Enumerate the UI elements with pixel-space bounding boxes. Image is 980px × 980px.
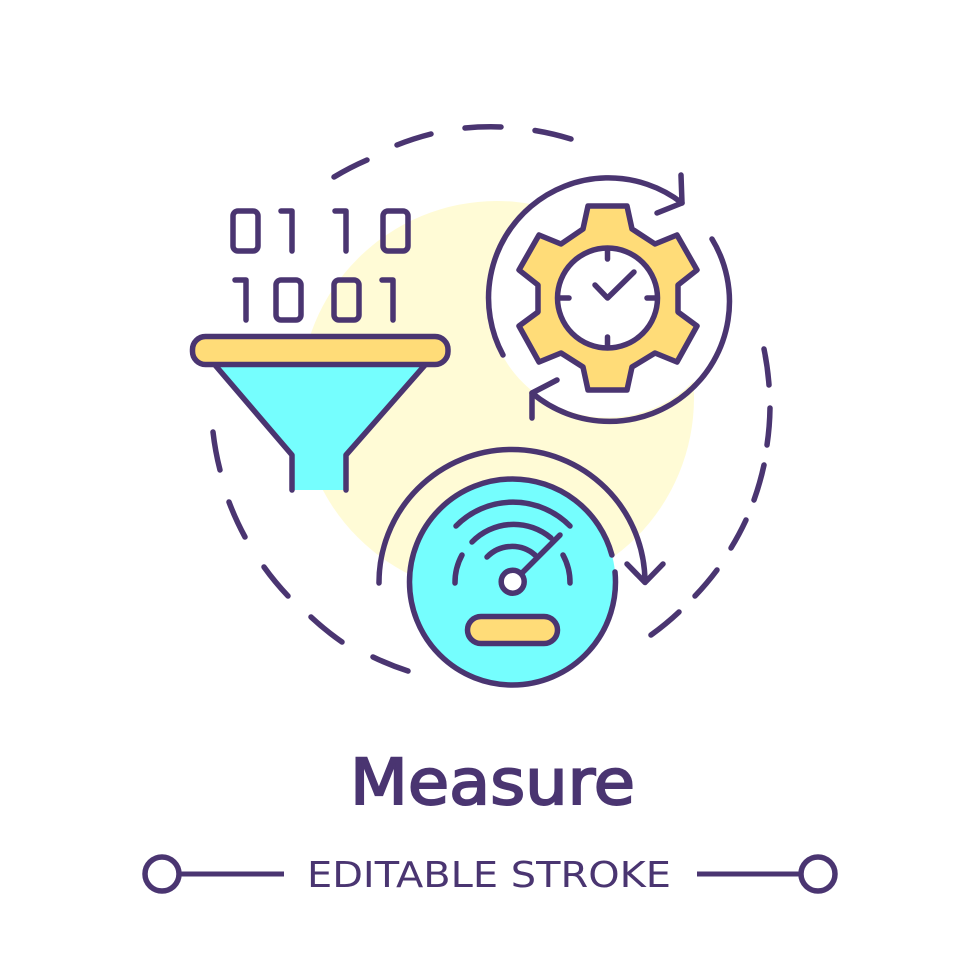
title: Measure [350,746,635,819]
icon: speedometer gauge with arrow [379,449,663,685]
background pale yellow circle [300,201,694,595]
icon: funnel [192,336,448,490]
caption row: editable stroke: EDITABLE STROKE [307,855,671,896]
binary digits [233,211,408,320]
icon: gear with clock and cycle arrows [488,175,729,421]
dashed outer ring [213,127,770,671]
caption row: editable stroke [145,855,835,896]
